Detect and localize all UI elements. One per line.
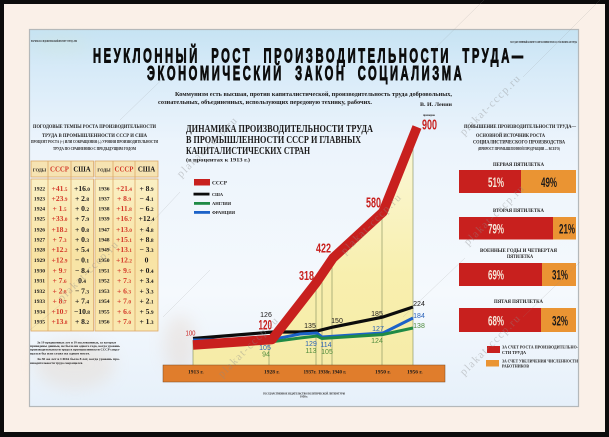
chart legend: СССР (212, 182, 227, 186)
publisher imprint (263, 392, 345, 398)
table: yearly growth rates: США (73, 166, 91, 174)
table: yearly growth rates: +16.0 (74, 184, 90, 193)
table: yearly growth rates: + 0.8 (75, 225, 89, 234)
left panel heading (31, 124, 158, 151)
year labels: 1938г. (318, 370, 332, 376)
table: yearly growth rates: + 7.3 (117, 276, 131, 285)
right panel heading: СОЦИАЛИСТИЧЕСКОГО ПРОИЗВОДСТВА (473, 140, 565, 146)
table: yearly growth rates: + 8.9 (117, 194, 131, 203)
table: yearly growth rates: 1928 (34, 248, 45, 254)
table: yearly growth rates: + 9.5 (117, 266, 131, 275)
watermark: plakat-cccp.ru: plakat-cccp.ru (462, 183, 527, 248)
top-left small print: НАУЧНО-ИССЛЕДОВАТЕЛЬСКИЙ ИНСТИТУТ ТРУДА 1958 (31, 40, 77, 43)
series: USSR (193, 127, 417, 345)
table: yearly growth rates: 1925 (34, 216, 45, 222)
table: yearly growth rates: + 9.7 (52, 266, 67, 275)
chart area fill (193, 140, 413, 365)
right panel heading: ПОВЫШЕНИЕ ПРОИЗВОДИТЕЛЬНОСТИ ТРУДА— (464, 124, 576, 130)
table: yearly growth rates: − 3.3 (139, 245, 154, 254)
Lenin quote: Коммунизм есть высшая, против капиталистической, производительность труда добровольных, (175, 91, 452, 98)
chart legend: США (212, 192, 224, 197)
table: yearly growth rates: 1954 (98, 299, 110, 305)
bar legend: ЗА СЧЕТ УВЕЛИЧЕНИЯ ЧИСЛЕННОСТИ (502, 360, 578, 364)
table: yearly growth rates: 1922 (34, 186, 45, 192)
value labels: England: 94 (262, 352, 270, 358)
table: yearly growth rates: 1939 (98, 216, 110, 222)
value labels: USSR: 100 (186, 328, 196, 338)
table: yearly growth rates: +12.2 (52, 245, 68, 254)
paper stains (30, 37, 196, 389)
Lenin quote (158, 91, 452, 108)
table: yearly growth rates: +18.2 (52, 225, 68, 234)
table: yearly growth rates: −10.8 (74, 307, 90, 316)
table: yearly growth rates: + 7.3 (52, 235, 67, 244)
bar legend (486, 346, 579, 368)
table footnote: приведены данные, не было ни одного года, когда уровень (30, 344, 120, 348)
left panel heading: ПОГОДОВЫЕ ТЕМПЫ РОСТА ПРОИЗВОДИТЕЛЬНОСТИ (33, 124, 157, 130)
bar: first five-year plan: ПЕРВАЯ ПЯТИЛЕТКА (493, 162, 544, 168)
table: yearly growth rates: +33.0 (52, 214, 68, 223)
right panel heading: ОСНОВНОЙ ИСТОЧНИК РОСТА (476, 131, 545, 139)
table: yearly growth rates: 1948 (98, 238, 110, 244)
table: yearly growth rates: + 8.9 (139, 184, 154, 193)
table: yearly growth rates: +41.5 (52, 184, 68, 193)
bar: war years and fourth five-year plan (459, 248, 576, 286)
bar: first five-year plan (459, 162, 576, 193)
table: yearly growth rates: 1949 (98, 248, 110, 254)
value labels: USSR: примерно (423, 113, 435, 117)
table: yearly growth rates: ГОДЫ (33, 168, 47, 172)
table footnote: За 30 же лет в США было 8 лет, когда уровень про- (37, 357, 120, 361)
table: yearly growth rates: 1929 (34, 258, 45, 264)
table: yearly growth rates: 1947 (98, 228, 110, 234)
table: yearly growth rates: + 8.7 (52, 296, 67, 306)
year labels: 1937г. (304, 370, 317, 376)
table: yearly growth rates: + 2.8 (75, 194, 89, 203)
publisher imprint: ГОСУДАРСТВЕННОЕ ИЗДАТЕЛЬСТВО ПОЛИТИЧЕСКОЙ ЛИТЕРАТУРЫ (263, 392, 345, 396)
table: yearly growth rates: + 0.3 (75, 235, 89, 244)
table: yearly growth rates: + 8.8 (139, 235, 154, 244)
table: yearly growth rates: + 3.3 (139, 286, 154, 296)
table: yearly growth rates: + 0.2 (75, 204, 89, 213)
table: yearly growth rates: +11.8 (116, 204, 132, 213)
table: yearly growth rates: − 0.1 (75, 256, 89, 264)
table: yearly growth rates: − 8.4 (75, 266, 89, 275)
bar legend: ЗА СЧЕТ РОСТА ПРОИЗВОДИТЕЛЬНО- (502, 346, 579, 350)
left panel heading: ТРУДА ПО СРАВНЕНИЮ С ПРЕДЫДУЩИМ ГОДОМ (53, 147, 136, 151)
table: yearly growth rates: 1933 (34, 299, 45, 305)
year labels: 1940 г. (332, 370, 347, 376)
watermark: plakat-cccp.ru: plakat-cccp.ru (458, 313, 523, 378)
table: yearly growth rates: + 7.0 (117, 317, 131, 326)
table: yearly growth rates: 1950 (98, 258, 110, 264)
left panel heading: ПРОЦЕНТ РОСТА (+) ИЛИ СОКРАЩЕНИЯ (–) УРОВНЯ ПРОИЗВОДИТЕЛЬНОСТИ (31, 140, 158, 144)
Lenin quote: сознательных, объединенных, использующих передовую технику, рабочих. (158, 99, 372, 106)
table: yearly growth rates: 1931 (34, 278, 45, 284)
table: yearly growth rates: СССР (115, 166, 133, 174)
value labels: USA (260, 301, 425, 330)
bar: war years and fourth five-year plan: 31% (552, 266, 568, 282)
table footnote: производительности труда в промышленности СССР сокра- (30, 348, 120, 352)
left panel heading: ТРУДА В ПРОМЫШЛЕННОСТИ СССР И США (42, 133, 147, 139)
series: England (193, 328, 413, 342)
chart legend: ФРАНЦИЯ (212, 210, 236, 215)
year labels (188, 370, 423, 376)
value labels: USA: 185 (371, 311, 383, 318)
table: yearly growth rates: 1927 (34, 238, 45, 244)
table footnote (30, 340, 120, 365)
bar: second five-year plan: 21% (559, 220, 575, 236)
table: yearly growth rates: 0.4 (78, 276, 86, 285)
bar: first five-year plan: 49% (541, 174, 557, 190)
table: yearly growth rates: СССР (50, 166, 69, 174)
year labels: 1928 г. (264, 370, 280, 376)
table: yearly growth rates: + 7.9 (75, 214, 89, 223)
table: yearly growth rates: 1936 (98, 186, 110, 192)
year labels: 1950 г. (375, 370, 391, 376)
value labels: France: 114 (320, 342, 332, 349)
value labels: France: 127 (372, 326, 384, 333)
table: yearly growth rates: ГОДЫ (97, 168, 111, 172)
table: yearly growth rates: 1955 (98, 310, 110, 316)
series: France (193, 318, 413, 340)
chart heading: (в процентах к 1913 г.) (186, 156, 250, 164)
table: yearly growth rates: +12.2 (116, 256, 132, 264)
bar: second five-year plan (459, 208, 576, 240)
chart legend (194, 179, 236, 215)
time axis band (163, 365, 445, 382)
value labels: USSR: 900 (422, 116, 437, 134)
chart heading: КАПИТАЛИСТИЧЕСКИХ СТРАН (186, 146, 310, 157)
value labels: France: 184 (413, 313, 425, 320)
publisher imprint: 1958 г. (300, 396, 308, 398)
bar: second five-year plan: ВТОРАЯ ПЯТИЛЕТКА (493, 208, 544, 214)
value labels: England: 124 (371, 338, 383, 345)
value labels: England: 105 (321, 349, 333, 356)
value labels: USSR: 318 (299, 268, 314, 283)
table: yearly growth rates: + 2.8 (52, 286, 67, 296)
value labels: USA: 224 (413, 301, 425, 308)
table: yearly growth rates: +16.7 (116, 214, 132, 223)
table: yearly growth rates (31, 161, 158, 331)
title: НЕУКЛОННЫЙ РОСТ ПРОИЗВОДИТЕЛЬНОСТИ ТРУДА— (93, 44, 524, 67)
table footnote: изводительности труда сокращался. (30, 361, 83, 365)
table: yearly growth rates: 1934 (34, 310, 45, 316)
right panel heading: (ПРИРОСТ ПРОМЫШЛЕННОЙ ПРОДУКЦИИ — ВСЕГО) (478, 146, 561, 151)
value labels: USA: 135 (304, 323, 316, 330)
table: yearly growth rates: США (138, 166, 155, 174)
chart heading (186, 124, 373, 164)
value labels: England: 138 (413, 323, 425, 330)
table: yearly growth rates: + 2.1 (139, 296, 154, 306)
table: yearly growth rates: − 6.2 (139, 204, 154, 213)
table: yearly growth rates: + 8.2 (75, 317, 89, 326)
table: yearly growth rates: + 0.4 (139, 266, 154, 275)
table: yearly growth rates: + 3.4 (139, 276, 154, 285)
bar: second five-year plan: 79% (488, 220, 504, 236)
bar: fifth five-year plan: 32% (552, 312, 568, 328)
table: yearly growth rates: 1930 (34, 268, 45, 274)
table: yearly growth rates: +13.0 (116, 225, 132, 234)
table: yearly growth rates: 1956 (98, 320, 110, 326)
bar: fifth five-year plan: ПЯТАЯ ПЯТИЛЕТКА (494, 299, 543, 305)
table: yearly growth rates: 1935 (34, 320, 45, 326)
table: yearly growth rates: + 1.5 (52, 204, 67, 213)
table: yearly growth rates: − 7.3 (75, 286, 89, 296)
table: yearly growth rates: 1932 (34, 289, 45, 295)
bar legend: СТИ ТРУДА (502, 351, 526, 355)
table: yearly growth rates: +12.4 (139, 214, 155, 223)
Lenin quote: В. И. Ленин (420, 103, 452, 108)
table: yearly growth rates: + 6.3 (117, 286, 131, 296)
table: yearly growth rates: + 7.0 (117, 296, 131, 306)
table: yearly growth rates: 0 (145, 256, 149, 264)
bar: war years and fourth five-year plan: ПЯТИЛЕТКА (507, 254, 533, 260)
value labels: USSR: 120 (258, 318, 272, 332)
table: yearly growth rates: − 4.1 (139, 194, 154, 203)
table: yearly growth rates: 1924 (34, 206, 45, 212)
value labels: France: 129 (305, 341, 317, 348)
table: yearly growth rates: +15.1 (116, 235, 132, 244)
watermark: plakat-cccp.ru: plakat-cccp.ru (458, 73, 523, 138)
value labels: England (262, 323, 425, 358)
table: yearly growth rates: + 7.6 (52, 276, 67, 285)
watermark: plakat-cccp.ru: plakat-cccp.ru (56, 239, 121, 304)
table: yearly growth rates: +23.9 (52, 194, 68, 203)
table: yearly growth rates: +10.7 (52, 307, 68, 316)
chart heading: ДИНАМИКА ПРОИЗВОДИТЕЛЬНОСТИ ТРУДА (186, 124, 373, 135)
value labels: USSR: 580 (366, 194, 381, 212)
title (93, 44, 524, 85)
year labels: 1956 г. (407, 370, 423, 376)
watermark: plakat-cccp.ru: plakat-cccp.ru (216, 315, 281, 380)
title: ЭКОНОМИЧЕСКИЙ ЗАКОН СОЦИАЛИЗМА (147, 61, 462, 85)
table: yearly growth rates: +12.9 (52, 256, 68, 264)
table footnote: За 19 предвоенных лет и 19 послевоенных, за которые (37, 340, 116, 344)
bar: war years and fourth five-year plan: 69% (488, 266, 504, 282)
table footnote: щался бы или стоял на одном месте. (30, 352, 90, 356)
table: yearly growth rates: + 5.9 (139, 307, 154, 316)
series: USA (193, 307, 413, 338)
table: yearly growth rates: + 1.3 (139, 317, 154, 326)
value labels: USA: 126 (260, 312, 272, 319)
table: yearly growth rates: + 7.4 (75, 296, 89, 306)
chart heading: В ПРОМЫШЛЕННОСТИ СССР И ГЛАВНЫХ (186, 135, 361, 146)
value labels: USSR: 422 (316, 240, 331, 256)
table: yearly growth rates: 1923 (34, 196, 45, 202)
value labels: France: 105 (259, 345, 271, 352)
table: yearly growth rates: 1938 (98, 206, 110, 212)
right panel heading (464, 124, 576, 151)
table: yearly growth rates: 1937 (98, 196, 110, 202)
watermark: plakat-cccp.ru: plakat-cccp.ru (175, 115, 240, 180)
table: yearly growth rates: +13.1 (116, 245, 132, 254)
bar: war years and fourth five-year plan: ВОЕННЫЕ ГОДЫ И ЧЕТВЕРТАЯ (480, 248, 557, 254)
line chart (163, 113, 445, 382)
value labels: France (259, 313, 425, 352)
table: yearly growth rates: +21.4 (116, 184, 132, 193)
bar: fifth five-year plan (459, 299, 576, 332)
table: yearly growth rates: + 6.6 (117, 307, 131, 316)
table: yearly growth rates: 1952 (98, 278, 110, 284)
table: yearly growth rates: 1951 (98, 268, 110, 274)
table: yearly growth rates: + 5.4 (75, 245, 89, 254)
chart legend: АНГЛИЯ (212, 201, 232, 206)
table: yearly growth rates: 1953 (98, 289, 110, 295)
table: yearly growth rates: + 4.8 (139, 225, 154, 234)
year labels: 1913 г. (188, 370, 204, 376)
bar legend: РАБОТНИКОВ (502, 364, 529, 368)
bar: fifth five-year plan: 68% (488, 312, 504, 328)
bar: first five-year plan: 51% (488, 174, 504, 190)
table: yearly growth rates: 1926 (34, 228, 45, 234)
value labels: USA: 150 (331, 318, 343, 325)
poster sheet (30, 30, 578, 406)
value labels: USSR (186, 113, 437, 338)
table: yearly growth rates: +13.8 (52, 317, 68, 326)
watermark: plakat-cccp.ru: plakat-cccp.ru (339, 192, 404, 257)
value labels: England: 113 (305, 348, 317, 355)
